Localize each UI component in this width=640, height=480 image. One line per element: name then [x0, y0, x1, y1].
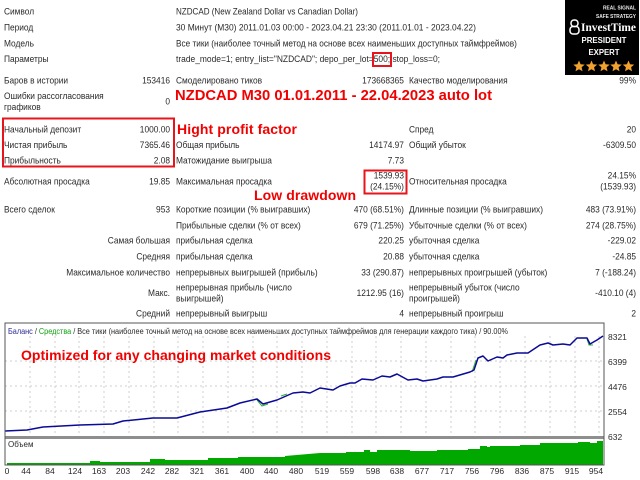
report rows: history quality: графиков: [4, 102, 41, 112]
x axis labels: 440: [264, 466, 278, 476]
report rows: drawdown: 19.85: [149, 176, 170, 187]
report rows: profit: 7365.46: [140, 140, 170, 150]
x axis labels: 242: [141, 466, 155, 476]
report rows: drawdown: 24.15%: [608, 170, 636, 181]
report rows: trades: 220.25: [378, 235, 404, 246]
highlight box: depo per lot: [373, 53, 391, 66]
report header: settings: NZDCAD (New Zealand Dollar vs Canadian Dollar): [176, 6, 358, 17]
report rows: trades: 679 (71.25%): [354, 220, 404, 231]
report header: settings: Период: [4, 22, 34, 33]
report rows: trades: выигрышей): [176, 293, 224, 304]
x axis labels: 400: [240, 466, 254, 476]
x axis labels: 44: [21, 466, 31, 476]
x axis labels: 84: [45, 466, 55, 476]
logo badge: PRESIDENT: [582, 36, 627, 45]
x axis labels: 559: [340, 466, 354, 476]
report rows: trades: непрерывных проигрышей (убыток): [409, 267, 547, 278]
report header: settings: 30 Минут (M30) 2011.01.03 00:00 - 2023.04.21 23:30 (2011.01.01 - 2023.04.22): [176, 22, 476, 33]
report rows: trades: непрерывный проигрыш: [409, 308, 504, 319]
x axis labels: 836: [515, 466, 529, 476]
report rows: profit: 1000.00: [140, 124, 170, 135]
report rows: history quality: 0: [165, 96, 170, 107]
highlight box: deposit, profit, profit factor: [3, 118, 174, 166]
x axis labels: 875: [540, 466, 554, 476]
report rows: profit: Начальный депозит: [4, 124, 81, 135]
report rows: profit: 2.08: [154, 155, 170, 166]
logo badge: EXPERT: [588, 48, 620, 57]
report rows: trades: 953: [156, 204, 170, 215]
report rows: trades: непрерывный выигрыш: [176, 308, 267, 319]
logo badge: [565, 0, 639, 75]
x axis labels: 480: [289, 466, 303, 476]
report rows: profit: 14174.97: [369, 140, 404, 150]
x axis labels: 638: [390, 466, 404, 476]
chart separator: [5, 436, 604, 439]
report rows: trades: Средняя: [136, 251, 170, 262]
report rows: trades: Убыточные сделки (% от всех): [409, 220, 527, 231]
report rows: trades: -229.02: [608, 235, 636, 246]
report header: settings: Модель: [4, 38, 34, 49]
x axis labels: 915: [565, 466, 579, 476]
report rows: history quality: 153416: [142, 75, 170, 86]
report rows: history quality: 173668365: [362, 75, 404, 86]
x axis labels: 163: [92, 466, 106, 476]
report rows: history quality: Баров в истории: [4, 75, 68, 86]
report rows: trades: 470 (68.51%): [354, 204, 404, 215]
report rows: history quality: 99%: [619, 75, 636, 86]
report rows: trades: Максимальное количество: [66, 267, 170, 278]
annotation: title: NZDCAD M30 01.01.2011 - 22.04.2023 auto lot: [175, 88, 492, 104]
chart frame: [5, 323, 604, 465]
report rows: profit: Общий убыток: [409, 140, 466, 150]
report rows: trades: Короткие позиции (% выигравших): [176, 204, 310, 215]
y axis labels: 4476: [608, 382, 627, 392]
equity line: [257, 339, 593, 406]
report rows: history quality: Ошибки рассогласования: [4, 91, 104, 101]
report rows: drawdown: (24.15%): [370, 181, 404, 192]
volume panel label: Объем: [8, 440, 34, 449]
report rows: trades: проигрышей): [409, 293, 460, 304]
report rows: trades: 274 (28.75%): [586, 220, 636, 231]
x axis labels: 954: [589, 466, 603, 476]
x axis labels: 598: [366, 466, 380, 476]
report rows: drawdown: Относительная просадка: [409, 176, 507, 187]
report rows: history quality: Смоделировано тиков: [176, 75, 262, 86]
x axis labels: 282: [165, 466, 179, 476]
logo mark: [570, 20, 579, 34]
report rows: drawdown: Абсолютная просадка: [4, 176, 90, 187]
logo badge: InvestTime: [581, 20, 637, 34]
report rows: trades: прибыльная сделка: [176, 251, 253, 262]
x axis labels: 203: [116, 466, 130, 476]
report rows: profit: 20: [627, 124, 636, 135]
x axis labels: 321: [190, 466, 204, 476]
report rows: trades: Средний: [136, 308, 170, 319]
balance chart: [5, 323, 627, 476]
y axis labels: 632: [608, 432, 622, 442]
annotation: high profit factor: Hight profit factor: [177, 121, 298, 137]
report rows: profit: Спред: [409, 124, 434, 135]
x axis labels: 361: [215, 466, 229, 476]
report rows: profit: -6309.50: [603, 140, 636, 150]
report rows: trades: 4: [399, 308, 404, 319]
x axis labels: 677: [415, 466, 429, 476]
report rows: profit: 7.73: [388, 155, 404, 166]
volume bars: [7, 441, 603, 465]
report rows: trades: -24.85: [612, 251, 636, 262]
report header: settings: Символ: [4, 6, 34, 17]
x axis labels: 796: [490, 466, 504, 476]
y axis labels: 2554: [608, 407, 627, 417]
highlight box: maximal drawdown: [364, 170, 406, 194]
x axis labels: 756: [465, 466, 479, 476]
report rows: trades: -410.10 (4): [595, 288, 636, 298]
x axis labels: 519: [315, 466, 329, 476]
report rows: drawdown: 1539.93: [374, 170, 404, 181]
report rows: drawdown: (1539.93): [600, 181, 636, 192]
report rows: trades: убыточная сделка: [409, 251, 479, 262]
report rows: trades: Самая большая: [108, 235, 170, 246]
report rows: trades: Прибыльные сделки (% от всех): [176, 220, 301, 231]
report header: settings: Параметры: [4, 54, 48, 64]
report rows: trades: прибыльная сделка: [176, 235, 253, 246]
report rows: profit: [4, 124, 636, 166]
report header: settings: [4, 6, 517, 64]
report rows: profit: Прибыльность: [4, 155, 61, 166]
report rows: trades: Длинные позиции (% выигравших): [409, 204, 543, 215]
report rows: profit: Чистая прибыль: [4, 140, 68, 150]
report rows: drawdown: Максимальная просадка: [176, 176, 272, 187]
y axis labels: 8321: [608, 332, 627, 342]
y axis labels: [608, 332, 627, 442]
report rows: trades: 483 (73.91%): [586, 204, 636, 215]
balance line: [5, 336, 603, 431]
report rows: profit: Общая прибыль: [176, 140, 240, 150]
logo badge: REAL SIGNAL: [603, 6, 637, 12]
annotation: optimized: Optimized for any changing market conditions: [21, 347, 331, 363]
x axis labels: 124: [68, 466, 82, 476]
report rows: trades: 1212.95 (16): [357, 288, 404, 298]
report rows: trades: непрерывных выигрышей (прибыль): [176, 267, 318, 278]
report rows: drawdown: [4, 170, 636, 192]
report rows: trades: 33 (290.87): [361, 267, 404, 278]
report rows: trades: убыточная сделка: [409, 235, 479, 246]
report rows: trades: Всего сделок: [4, 204, 55, 215]
x axis labels: 0: [5, 466, 10, 476]
report rows: trades: 7 (-188.24): [595, 267, 636, 278]
report header: settings: trade_mode=1; entry_list="NZDCAD"; depo_per_lot=500; stop_loss=0;: [176, 54, 440, 64]
report rows: profit: Матожидание выигрыша: [176, 155, 272, 166]
report rows: trades: [4, 204, 636, 319]
report rows: history quality: Качество моделирования: [409, 75, 508, 86]
report rows: trades: 20.88: [383, 251, 404, 262]
annotation: low drawdown: Low drawdown: [254, 187, 356, 203]
chart legend: Баланс / Средства / Все тики (наиболее точный метод на основе всех наименьших доступных таймфреймов для генерации каждого тика) / 90.00%: [8, 327, 508, 336]
report rows: trades: непрерывная прибыль (число: [176, 282, 292, 293]
x axis labels: [5, 466, 603, 476]
rating stars: [573, 60, 634, 71]
report rows: trades: Макс.: [148, 288, 170, 298]
report rows: trades: непрерывный убыток (число: [409, 282, 520, 293]
y axis labels: 6399: [608, 357, 627, 367]
x axis labels: 717: [440, 466, 454, 476]
report rows: history quality: [4, 75, 636, 112]
report rows: trades: 2: [631, 308, 636, 319]
report header: settings: Все тики (наиболее точный метод на основе всех наименьших доступных таймфреймов): [176, 38, 517, 49]
